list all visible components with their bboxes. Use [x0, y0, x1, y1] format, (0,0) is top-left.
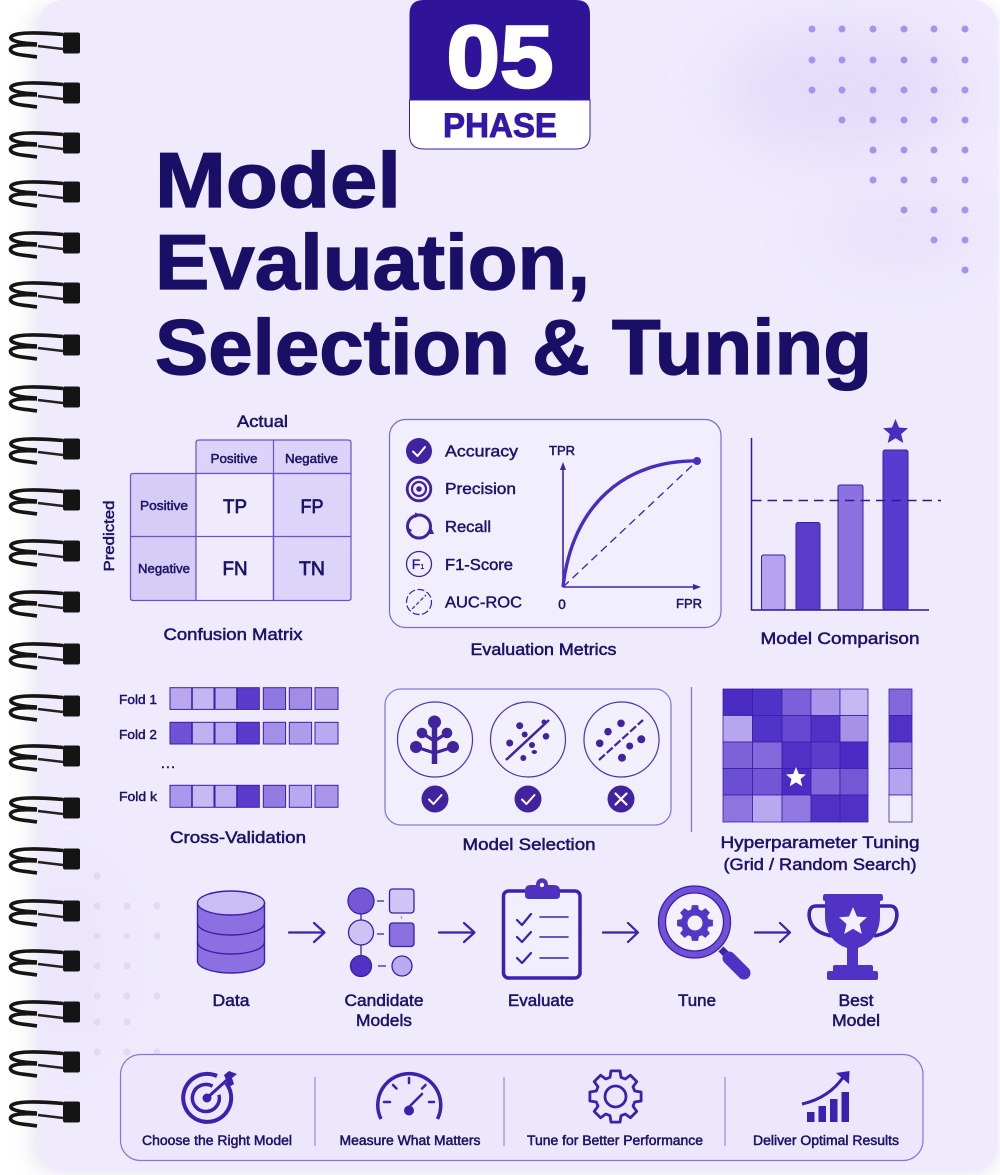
icon: target with arrow: [183, 1071, 237, 1122]
roc chart: TPR: [549, 443, 575, 458]
phase badge: PHASE: [443, 107, 557, 145]
heatmap grid: [723, 689, 868, 822]
workflow: data: [198, 891, 264, 1010]
workflow: candidate models: Candidate: [344, 992, 424, 1010]
icon: star: [883, 419, 908, 443]
selection caption: Model Selection: [462, 836, 596, 854]
matrix cell labels: TP: [223, 497, 247, 518]
icon: linear separator model: [490, 702, 566, 777]
matrix cell labels: [138, 451, 338, 580]
icon: recall loop: [407, 512, 434, 538]
roc chart: 0: [558, 597, 566, 612]
matrix caption: Confusion Matrix: [164, 626, 303, 644]
fold k cells: [170, 785, 338, 807]
icon: candidates: [348, 888, 414, 976]
title: Model: [155, 136, 401, 224]
icon: check badge: [422, 786, 448, 812]
fold labels: Fold 2: [119, 727, 157, 742]
matrix axis label predicted: Predicted: [101, 500, 118, 572]
matrix cell labels: Positive: [210, 451, 258, 466]
workflow: best model: Best: [838, 992, 874, 1010]
matrix cell labels: Negative: [138, 561, 190, 576]
arrow: [755, 923, 790, 942]
matrix cell labels: Negative: [285, 451, 338, 466]
metrics caption: Evaluation Metrics: [470, 641, 616, 659]
icon: best parameter star: [786, 767, 806, 786]
cross-validation caption: Cross-Validation: [170, 829, 306, 847]
panel: model comparison: [752, 419, 941, 648]
tuning caption: [720, 833, 920, 874]
metric names: [445, 444, 522, 612]
matrix grid: [130, 440, 351, 600]
icon: gauge: [378, 1074, 441, 1119]
icon: f1: F1: [412, 556, 424, 572]
icon: accuracy check: [406, 438, 432, 464]
panel: evaluation metrics: [390, 420, 721, 659]
fold 1 cells: [170, 688, 338, 709]
measure label: Measure What Matters: [340, 1133, 481, 1148]
tuning caption: Hyperparameter Tuning: [720, 833, 920, 852]
matrix axis label actual: Actual: [237, 413, 288, 431]
workflow: candidate models: [344, 888, 424, 1030]
arrow: [439, 923, 474, 942]
tuning caption: (Grid / Random Search): [724, 855, 916, 874]
decorative dots top right: [808, 26, 968, 274]
metric names: Recall: [445, 519, 491, 536]
panel: key takeaways: [120, 1054, 923, 1160]
title: Selection & Tuning: [155, 303, 872, 391]
bar chart: [752, 438, 941, 610]
icon: trophy: [809, 894, 897, 980]
workflow: evaluate: Evaluate: [508, 992, 574, 1010]
matrix cell labels: FP: [300, 497, 324, 518]
panel: hyperparameter tuning: [720, 689, 920, 874]
roc chart: [549, 443, 702, 612]
icon: precision target: [407, 477, 431, 501]
title: Evaluation,: [155, 218, 590, 306]
phase badge: 05: [446, 7, 554, 106]
icon: database: [198, 891, 264, 973]
comparison caption: Model Comparison: [760, 630, 920, 648]
scale column: [889, 689, 912, 822]
fold labels: Fold k: [119, 789, 158, 804]
choose label: Choose the Right Model: [142, 1133, 292, 1148]
workflow: data: Data: [212, 992, 250, 1010]
workflow: best model: Model: [832, 1012, 880, 1030]
workflow: evaluate: [504, 878, 580, 1010]
panel: model selection: [385, 689, 671, 825]
phase badge: [410, 0, 590, 149]
metric names: Precision: [445, 481, 516, 498]
decorative dots bottom left: [94, 872, 160, 1086]
icon: decision tree model: [398, 702, 472, 777]
spiral binding: [10, 32, 80, 1126]
icon: rejected model: [584, 702, 659, 777]
tune label: Tune for Better Performance: [527, 1133, 703, 1148]
workflow: best model: [809, 894, 897, 1030]
icon: gear: [590, 1071, 641, 1122]
matrix cell labels: TN: [299, 559, 325, 580]
icon: magnifier with gear: [658, 886, 744, 973]
workflow: tune: Tune: [678, 992, 716, 1010]
fold labels: [119, 692, 175, 804]
icon: auc dashed circle: [406, 590, 432, 614]
icon: cross badge: [608, 786, 634, 812]
arrow: [603, 923, 638, 942]
roc chart: FPR: [676, 596, 702, 611]
fold labels: Fold 1: [119, 692, 157, 707]
metric names: F1-Score: [445, 557, 513, 574]
fold labels: ...: [161, 755, 175, 771]
deliver label: Deliver Optimal Results: [753, 1133, 899, 1148]
panel: confusion matrix: [101, 413, 351, 644]
metric names: Accuracy: [445, 444, 518, 460]
panel: cross-validation: [119, 688, 338, 847]
icon: clipboard: [504, 878, 580, 978]
workflow: tune: [658, 886, 744, 1010]
arrow: [289, 923, 324, 942]
fold 2 cells: [170, 722, 338, 744]
icon: f1: [406, 552, 432, 576]
title: [155, 136, 872, 391]
matrix cell labels: Positive: [140, 498, 188, 513]
icon: check badge: [514, 786, 542, 812]
metric names: AUC-ROC: [445, 594, 522, 612]
matrix cell labels: FN: [222, 559, 248, 580]
workflow: candidate models: Models: [356, 1012, 412, 1030]
icon: growth chart: [802, 1071, 850, 1122]
